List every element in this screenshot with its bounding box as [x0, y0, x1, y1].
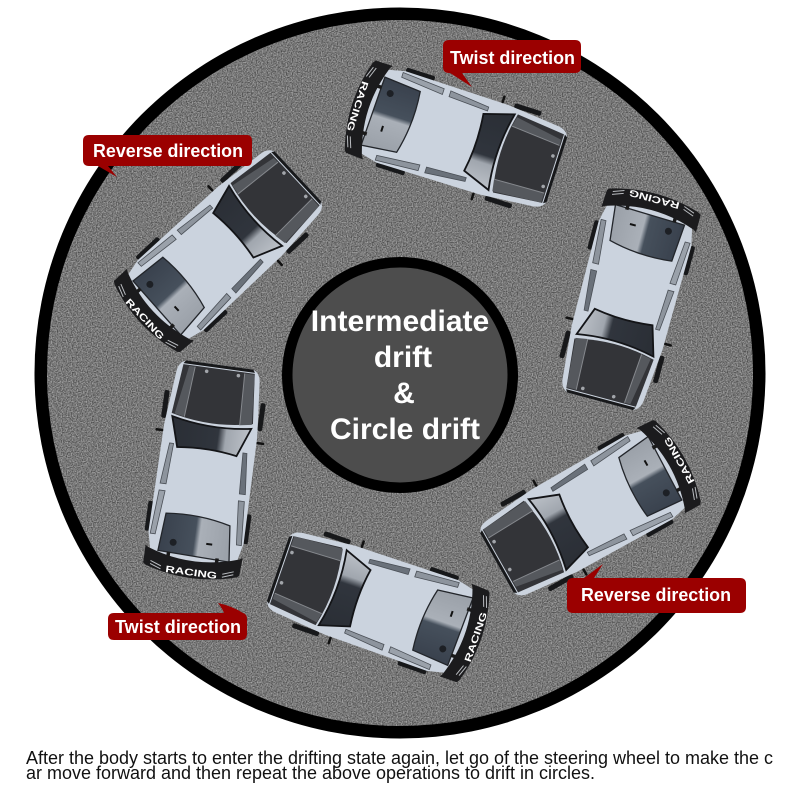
car: lower right: RACING — [662, 435, 697, 485]
car: top: RACING — [344, 80, 370, 132]
car: upper left: RACING — [123, 297, 166, 342]
car: right: RACING — [628, 186, 681, 211]
centre circle with title: & — [393, 377, 415, 410]
callout: reverse direction lower right — [567, 564, 746, 613]
car: right — [547, 179, 709, 416]
caption text: After the body starts to enter the drifting state again, let go of the steering wheel to make the c — [26, 748, 773, 768]
car: lower left — [136, 358, 274, 586]
centre circle with title — [282, 257, 518, 493]
centre circle with title: drift — [374, 341, 432, 374]
callout: twist direction top — [443, 40, 581, 87]
callout: reverse direction lower right: Reverse direction — [581, 585, 731, 605]
callout: twist direction top: Twist direction — [450, 48, 575, 68]
callout: twist direction lower left: Twist direction — [115, 617, 241, 637]
car: lower left: RACING — [165, 564, 218, 582]
car: upper left — [103, 136, 335, 364]
centre circle with title: Circle drift — [330, 413, 480, 446]
callout: reverse direction upper left — [83, 135, 252, 177]
caption text: ar move forward and then repeat the above operations to drift in circles. — [26, 763, 595, 783]
centre circle with title: Intermediate — [311, 305, 489, 338]
callout: reverse direction upper left: Reverse direction — [93, 141, 243, 161]
asphalt surface — [47, 20, 753, 726]
car: top — [335, 52, 574, 222]
car: bottom: RACING — [463, 611, 490, 664]
callout: twist direction lower left — [108, 603, 247, 640]
caption text — [26, 748, 773, 783]
car: lower right — [470, 409, 712, 611]
car: bottom — [260, 517, 500, 691]
